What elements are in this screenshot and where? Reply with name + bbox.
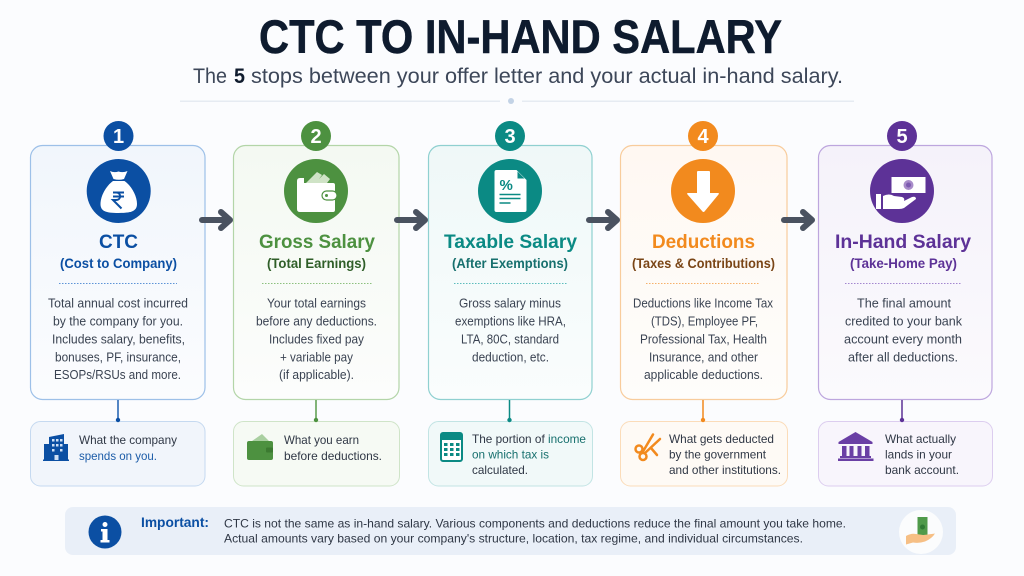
body text: (if applicable). bbox=[279, 367, 354, 382]
note text: Actual amounts vary based on your company's structure, location, tax regime, and individual circumstances. bbox=[224, 532, 803, 546]
body text: credited to your bank bbox=[845, 314, 962, 328]
body text bbox=[256, 296, 377, 382]
icon: scissors bbox=[636, 434, 660, 460]
body text: Your total earnings bbox=[267, 296, 366, 310]
body text: LTA, 80C, standard bbox=[461, 332, 559, 346]
body text: Includes salary, benefits, bbox=[52, 332, 185, 346]
icon: wallet bbox=[284, 159, 348, 223]
step badge 3: 3 bbox=[504, 126, 516, 148]
body text: Total annual cost incurred bbox=[48, 296, 188, 310]
callout: important note bbox=[65, 507, 956, 555]
caption: and other institutions. bbox=[669, 463, 781, 477]
subheading: (Total Earnings) bbox=[267, 256, 366, 271]
caption bbox=[472, 432, 586, 477]
caption: by the government bbox=[669, 448, 767, 462]
subheading: (Cost to Company) bbox=[60, 256, 177, 271]
connector 2 bbox=[314, 400, 318, 422]
note text: CTC is not the same as in-hand salary. Various components and deductions reduce the final amount you take home. bbox=[224, 516, 846, 530]
body text: + variable pay bbox=[280, 350, 353, 364]
icon: money bag with rupee bbox=[87, 159, 151, 223]
icon: bank bbox=[838, 432, 874, 461]
caption: on which tax is bbox=[472, 448, 549, 462]
body text: by the company for you. bbox=[53, 314, 183, 328]
body text: account every month bbox=[844, 332, 962, 346]
step badge 1: 1 bbox=[113, 126, 124, 148]
summary card: taxable bbox=[428, 422, 592, 486]
connector 3 bbox=[507, 400, 512, 422]
subheading: (After Exemptions) bbox=[452, 256, 568, 271]
panel: Gross Salary bbox=[234, 121, 399, 400]
icon: hand receiving money bbox=[870, 159, 934, 223]
connector 4 bbox=[701, 400, 705, 422]
body text: bonuses, PF, insurance, bbox=[55, 350, 181, 364]
summary card: company spend bbox=[30, 422, 205, 486]
caption: calculated. bbox=[472, 463, 528, 477]
caption bbox=[79, 433, 177, 463]
step badge 5: 5 bbox=[896, 126, 908, 148]
subheading: (Take-Home Pay) bbox=[850, 256, 957, 271]
icon: info bbox=[88, 516, 122, 548]
connector 1 bbox=[116, 400, 120, 422]
heading: Deductions: Deductions bbox=[652, 231, 755, 253]
body text: deduction, etc. bbox=[472, 350, 549, 364]
body text bbox=[844, 296, 962, 364]
heading: In-Hand Salary: In-Hand Salary bbox=[835, 231, 971, 253]
arrow: Gross to Taxable bbox=[397, 212, 425, 228]
summary card: in-hand bbox=[818, 422, 992, 486]
heading: CTC: CTC bbox=[99, 231, 138, 253]
icon: small wallet bbox=[247, 434, 273, 460]
panel: CTC bbox=[30, 121, 205, 400]
body text: applicable deductions. bbox=[644, 367, 763, 382]
icon: hand holding cash bbox=[899, 510, 943, 554]
label: Important: bbox=[141, 514, 209, 530]
caption: The portion of income bbox=[472, 432, 586, 446]
heading: Taxable Salary: Taxable Salary bbox=[444, 231, 577, 253]
icon: tax document bbox=[478, 159, 542, 223]
body text: (TDS), Employee PF, bbox=[651, 314, 758, 328]
subheading: (Taxes & Contributions) bbox=[632, 256, 775, 271]
body text: after all deductions. bbox=[848, 350, 958, 364]
step badge 4: 4 bbox=[697, 126, 709, 148]
caption: What the company bbox=[79, 433, 177, 447]
icon: calculator bbox=[441, 433, 462, 461]
step badge 1 bbox=[104, 121, 134, 151]
panel: Deductions bbox=[620, 121, 787, 400]
body text: exemptions like HRA, bbox=[455, 314, 566, 328]
body text bbox=[633, 296, 773, 382]
body text: The final amount bbox=[857, 296, 951, 310]
caption: spends on you. bbox=[79, 449, 157, 463]
caption: before deductions. bbox=[284, 449, 382, 463]
subtitle: The bbox=[193, 65, 227, 88]
arrow: Deductions to In-Hand bbox=[784, 212, 812, 228]
panel: In-Hand Salary bbox=[818, 121, 992, 400]
body text: Insurance, and other bbox=[649, 350, 759, 364]
body text: ESOPs/RSUs and more. bbox=[54, 367, 181, 382]
heading: Gross Salary: Gross Salary bbox=[259, 231, 375, 253]
caption: lands in your bbox=[885, 448, 952, 462]
caption bbox=[284, 433, 382, 463]
body text: Includes fixed pay bbox=[269, 332, 364, 346]
step badge 3 bbox=[495, 121, 525, 151]
body text: before any deductions. bbox=[256, 314, 377, 328]
title: CTC TO IN-HAND SALARY bbox=[259, 10, 782, 63]
step badge 2 bbox=[301, 121, 331, 151]
icon: down arrow bbox=[671, 159, 735, 223]
panel: Taxable Salary bbox=[428, 121, 592, 400]
body text bbox=[455, 296, 566, 364]
icon: office building bbox=[43, 434, 69, 461]
connector 5 bbox=[900, 400, 904, 422]
caption bbox=[669, 432, 781, 477]
body text: Professional Tax, Health bbox=[640, 332, 767, 346]
step badge 5 bbox=[887, 121, 917, 151]
arrow: Taxable to Deductions bbox=[589, 212, 617, 228]
subtitle: stops between your offer letter and your actual in-hand salary. bbox=[251, 65, 843, 88]
icon: tax document: % bbox=[500, 177, 513, 194]
caption: What gets deducted bbox=[669, 432, 774, 446]
arrow: CTC to Gross bbox=[202, 212, 230, 228]
caption: What actually bbox=[885, 432, 956, 446]
subtitle: 5 bbox=[234, 65, 245, 88]
body text: Deductions like Income Tax bbox=[633, 296, 773, 310]
body text: Gross salary minus bbox=[459, 296, 561, 310]
caption: bank account. bbox=[885, 463, 959, 477]
caption: What you earn bbox=[284, 433, 359, 447]
step badge 4 bbox=[688, 121, 718, 151]
summary card: earnings bbox=[234, 422, 400, 486]
summary card: deductions bbox=[620, 422, 788, 486]
note text bbox=[224, 516, 846, 546]
step badge 2: 2 bbox=[310, 126, 322, 148]
caption bbox=[885, 432, 959, 477]
body text bbox=[48, 296, 188, 382]
